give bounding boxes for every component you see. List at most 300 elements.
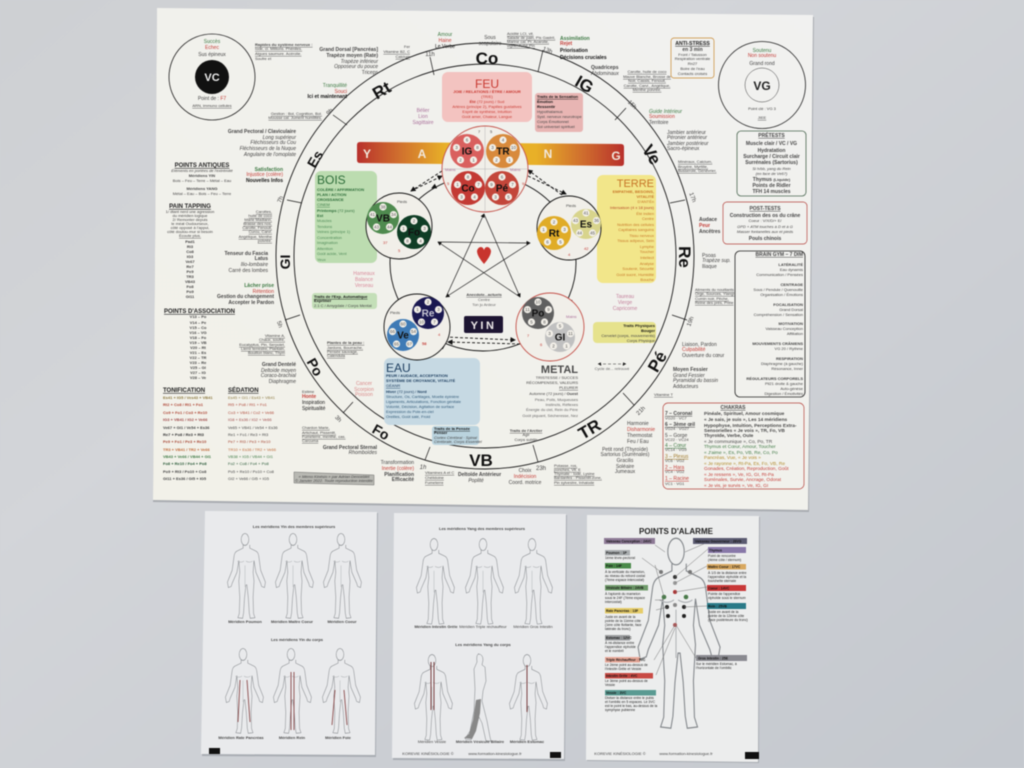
panel: post-tests: GPD + ATM touches à D et à G [737,224,793,229]
alarm labels right: Rein : 25VB [708,604,727,608]
panel: pain tapping: côté doulou-mur si besoin [167,229,213,234]
sheet: méridiens yang [392,513,567,761]
meridian disc: Po: 9 [547,307,550,312]
panel: tonification: Po9 + Rt3 / Po10 + Co8 [163,469,207,474]
panel: wood circle group: 37 [383,240,388,245]
panel: FEU: JOIE / RELATIONS / ÊTRE / AMOUR [453,89,521,94]
panel: tonification: GI11 + Es36 / GI5 + IG5 [163,476,207,481]
alarm labels left: Vessie : 3VC [606,691,627,695]
left column texts: upper: Souci [334,89,347,95]
panel: wood circle group: 5 [398,248,401,253]
left column texts: upper: Soufre et [255,56,272,61]
panel: pretests: Thymus (Liquide) [753,177,791,183]
left column texts: upper: Lion [418,114,428,120]
panel: tonification: Co9 + Fo1 / Co3 + Re10 [163,410,208,415]
sheet: méridiens yang: Méridien Vessie [418,739,447,744]
panel: chakras: CHAKRAS [720,405,746,411]
left column texts: upper: Algues saumure. Acérolie. [255,51,301,56]
panel: post-tests [723,202,807,244]
panel: EAU: EAU [386,361,411,375]
alarm labels left: Estomac : 12VC [606,636,632,640]
left column texts: upper: Angulaire de l'omoplate [243,152,296,158]
panel: anti-stress: Front / Talusson [678,52,707,57]
panel: VG circle [718,42,806,128]
left column texts: lower: Eucalyptus, Pin, Serpolet, [239,342,285,347]
left column texts: middle: Carré des lombes [229,268,268,274]
left column texts: lower: Grand Pectoral Sternal [323,445,378,451]
panel: points d'association: V14 – Pe [190,320,207,325]
left column texts: upper: Vitamine B2, C [383,49,410,54]
panel: pretests: Points de Ridler [752,183,791,189]
meridian disc: Ve: 54 [411,329,416,334]
meridian disc: Rt: 3 [563,227,566,232]
panel: traits de la sensation: Hypothalamus [537,109,563,114]
panel: pain tapping [166,204,214,299]
panel: TERRE: Nutrition des cellules [617,222,654,227]
left column texts: upper: Amour [438,32,453,38]
alarm labels right: Coeur : 14VC [708,586,730,590]
left column texts: middle: Accepter le Pardon [228,300,274,306]
panel: traits de la pensée: Cérébrale, Corps Essentiel [434,439,482,444]
left column texts: lower: Inertie (colère) [382,466,414,472]
left column texts: lower [239,333,501,485]
meridian disc: Es: Es [580,220,593,230]
meridian disc: VB: 38 [380,204,386,210]
meridian figures row 2 [225,649,360,733]
panel: VG circle: Grand rond [749,61,775,67]
panel: brain gym: Résonance, Inner [771,366,804,371]
hour labels: 7h [277,195,285,204]
panel: pretests: Hydratation [758,148,785,154]
sheet footer: KOREVIE KINÉSIOLOGIE © [594,751,646,756]
panel: pretests: Si h/bb, yang du Rein [752,166,791,171]
meridian disc: Co: 7 [477,182,480,187]
bottom right texts: Sacro-épineux [667,146,700,152]
meridian names on wheel: Rt [369,78,395,103]
alarm labels left: latérale du tronc) [605,627,630,631]
left column texts: lower: Spiritualité [302,406,326,412]
left column texts: lower: Poisson [355,392,373,398]
panel: metal circle group: 7 [527,333,530,338]
meridian disc: TR: TR [496,146,510,158]
panel: FEU: Esprit de synthèse, Intuition [462,109,512,114]
panel: points d'association: V28 – Ve [190,375,207,380]
panel: METAL: Instincts, Réflexes [546,402,578,407]
bottom right texts: Balance [355,277,373,283]
panel: post-tests: POST-TESTS [749,206,781,212]
bottom right texts: Bardanfes - Pissenlit-zone, [554,475,602,480]
panel: brain gym: CENTRAGE [781,282,803,287]
alarm labels right: À 1/3 de la distance entre [708,571,747,575]
meridian disc: Fo [397,215,431,249]
bottom right texts: Liaison, Pardon [682,342,717,348]
panel: chakras: « J'aime », Es, Po, VB, Re, Co, Po [704,450,778,456]
panel: VC circle [169,34,255,120]
panel: VG circle: JIEE [758,115,767,120]
panel: traits d'expression automatique [312,293,377,309]
panel: chakras: Pinéale, Spirituel, Amour cosmique [704,411,785,417]
panel: pain tapping: PAIN TAPPING [169,204,211,210]
alarm labels left: au niveau du rebord costal [605,574,645,578]
alarm labels right: (4ème côte / sternum) [708,558,741,562]
panel: chakras: VC1 · VG1 [665,481,685,486]
left column texts: lower: Grand Dentelé [262,362,296,368]
panel: sédation: TR10 + Es36 / TR2 + Ve66 [228,447,277,452]
meridian disc: TR: 3 [491,145,494,150]
panel: sédation: IG8 + Es36 / IG2 + Ve66 [228,417,272,422]
panel: traits physiques: Cervelet (corps, mouvements) [601,333,656,338]
panel: pain tapping: Co8 [186,249,195,254]
left column texts: upper: Trapèze inférieur [341,59,378,65]
panel: points antiques: Éléments en portées de l'extrémité [171,168,234,173]
panel: copyright footer: « Mémo Kinésio » par Adrian Denoeblet [299,474,370,479]
panel: chakras: VC6 · VG2 [665,458,685,463]
hour labels: 21h [636,406,647,417]
left column texts: lower: Estime [302,389,315,394]
bottom right texts: Iliaque [702,264,717,270]
hour labels: 11h [425,52,435,58]
panel: BOIS: CINEM [317,202,330,207]
alarm labels left: et le nombril [605,649,624,653]
hour labels: 15h [626,100,637,111]
left column texts: lower: Fumeterre [425,480,444,485]
bottom right texts: Trapèze sup. [702,258,731,264]
panel: pain tapping: Ri3 [187,244,194,249]
meridian disc: Pé: 5 [507,194,510,200]
panel: brain gym: Pil21 droite & gauche [765,381,804,386]
panel: BOIS: Attention [317,246,333,251]
alarm labels right: (face postérieure du tronc) [708,618,748,622]
panel: chakras: VC22 · VC24 [665,437,689,442]
left column texts: middle [217,209,274,306]
alarm labels left: Le 3ème point au-dessus de [605,679,648,683]
sheet: méridiens yang: Méridien Triple réchauffeur [459,624,507,629]
meridian disc: Pé: 7 [511,182,514,187]
panel: traits de la sensation: Émotion [537,99,554,104]
meridian disc: Re: 2 [427,300,430,304]
alarm labels left: l'Intestin Grêle et Vessie [605,667,641,671]
panel: pain tapping: Écoute plus. [179,233,201,238]
bottom right texts: Indécision [514,474,536,480]
sheet: méridiens yang: KOREVIE KINÉSIOLOGIE © [402,751,454,756]
left column texts: lower: Planification [384,472,414,478]
hour labels: 13h [542,47,553,56]
panel: METAL: TRISTESSE / SUCCES [536,375,578,380]
left column texts: upper: Triceps [362,70,378,76]
panel: traits de la pensée: Cortex Cérébral · Spinal [434,435,477,440]
panel: traits physiques: Bouger [641,328,655,333]
panel: brain gym: BRAIN GYM – 7 DIM [755,252,803,258]
meridian disc: Fo: Fo [408,228,420,238]
bottom right texts: Thymate · Iode, Lysine [554,471,595,476]
panel: tonification: VB43 + Ve66 / VB44 + GI1 [163,454,212,459]
panel: points antiques: Métal – Eau – Bois – Feu – Terre [173,191,232,196]
panel: points d'association: V15 – Co [190,325,207,330]
sheet: méridiens yang: Méridien Vésicule Biliaire [456,739,505,744]
panel: BOIS: BOIS [317,173,346,187]
meridian disc: Re: 7 [433,320,436,324]
panel: sédation: GI2 + Ve66 / GI5 + IG5 [228,476,270,481]
panel: sédation: Es45 + GI1 / Es43 + VB41 [228,395,276,400]
panel: copyright footer: © Janvier 2022. Toute reproduction interdite [295,478,374,483]
sheet: méridiens yin: Méridien Coeur [327,619,357,624]
meridian disc: Fo: 8 [406,238,409,244]
panel: brain gym: Organisation / Émotions [760,292,803,297]
pentagram star [438,214,530,297]
panel: earth circle group [537,196,601,260]
left column texts: lower: Rhomboïdes [349,450,377,456]
meridian disc: VB: 44 [387,224,392,230]
panel: EAU [384,358,480,425]
bottom right texts: Pyramidal du bassin [673,378,718,384]
panel: traits de la sensation: Corps Émotionnel [537,119,569,124]
left column texts: lower: Deltoïde moyen [261,368,296,374]
meridian disc: Re: Re [422,308,435,320]
meridian names on wheel: Fo [370,421,392,443]
meridian disc: Co: 4 [473,194,476,200]
alarm labels right: Pointe de l'appendice [708,592,740,596]
left column texts: lower: Plantes de la peau : [327,340,364,345]
bottom right texts: Péronier antérieur [667,135,707,141]
panel: chakras: Hypophyse, Intuition, Perceptions Extra- [704,423,797,429]
panel: tonification: IG3 + VB41 / IG2 + Ve66 [163,417,208,422]
bottom right texts: Rejet [560,41,573,47]
panel: pain tapping: le méat Oudourseux, [171,221,209,226]
meridian disc: Fo: 3 [423,226,426,231]
left column texts: upper: Injustice (colère) [246,172,283,178]
bottom right texts: Assimilation [560,36,590,42]
meridian disc: Pé [485,171,519,205]
YIN box: YIN [471,320,496,332]
panel: tonification [163,388,213,481]
alarm labels left: Intestin Grêle : 4VC [606,674,638,678]
bottom right texts: Bruyère, Myrtille, [678,164,708,169]
panel: chakras: 1 – Racine [665,476,689,482]
meridian disc: Es: 44 [577,230,582,236]
panel: chakras: VG20 · VC7 [665,416,687,420]
bottom right texts: Psoas [702,253,716,259]
panel: EAU: Volonté, Décision, Agitation de surface [386,404,455,409]
panel: BOIS: Yeux [317,257,326,262]
panel: traits d'expression automatique: 2.1 C / Amygdale / Corps Mental [314,303,372,308]
panel: anti-stress: Contacts croisés [678,71,707,76]
panel: chakras: Pancréas, Vue, « Je vois » [704,455,761,461]
panel: VC circle: Sus épineux [198,52,226,58]
alarm labels left: À la verticale du mamelon, [605,570,645,574]
bottom right texts: Ouverture du cœur [682,353,725,359]
left column texts: lower: Efficacité [392,477,414,483]
panel: chakras: Thymus et Cœur, Amour, Toucher [704,444,776,450]
meridian disc: Ve: Ve [397,330,409,342]
bottom right texts: Gracilis [617,458,634,464]
anecdote caption: Centre [478,297,491,302]
hour labels: 1h [420,465,427,471]
bottom right texts: Disharmonie [627,427,655,433]
meridian disc: VB: 43 [374,224,379,230]
left column texts: lower: Fumeterre, menthe, cas. [302,434,346,439]
panel: fire circle group: 5 [447,181,450,186]
panel: BOIS [315,171,377,263]
panel: tonification: Ve67 + GI1 / Ve54 + Es36 [163,425,210,430]
sheet: méridiens yin [201,511,378,757]
panel: water circle group: 58 [422,341,427,346]
panel: pain tapping: IG3 [187,254,194,259]
alarm labels left: sous le 24F (7ème espace [605,596,645,600]
panel: post-tests: Pouls chinois [749,236,781,242]
panel: water circle group [384,294,450,360]
panel: TERRE: Tissus adipeux, Sein [617,238,654,243]
panel: VC circle: Point de : F7 [198,96,226,102]
panel: chakras: 5 – Gorge [665,433,687,439]
panel: tonification: Fo8 + Re10 / Fo4 + Po8 [163,461,207,466]
meridian disc: Pé: 3 [494,194,497,200]
hour labels: 23h [536,466,546,472]
panel: pain tapping: Fo8 [186,284,194,289]
panel: metal circle group [516,293,584,361]
panel: BOIS: Est [317,213,324,218]
panel: TERRE: Intellect [640,255,655,260]
panel: pain tapping: Po9 [186,289,194,294]
panel: points d'association: V25 – GI [190,365,206,370]
panel: brain gym: Digestion / Émotivités [765,391,803,396]
panel: VG circle: VG [753,79,771,93]
left column texts: lower: Calendula [327,353,346,358]
meridian disc: Ve: 67 [407,342,412,346]
bottom right texts: Reine des prés, Prêle [695,300,734,305]
alarm labels right: pointe de la 12ème côte [708,614,744,618]
bottom right texts: Soléaire [616,464,634,470]
left column texts: middle: Tenseur du Fascia [224,251,268,257]
meridian disc: Co: Co [461,184,475,194]
left column texts: middle: Carotte, Fenouil, [242,225,272,230]
panel: sédation [228,386,278,481]
alarm labels right: fourchette sternale [708,579,736,583]
left column texts: upper: Nouvelles Infos [246,178,283,184]
panel: EAU: Hiver (72 jours) / Nord [386,389,427,394]
panel: chakras: VG24 · VG27 [665,426,690,431]
panel: metal circle group: Mains [566,314,577,319]
bottom right texts: Grand Fessier [673,373,705,379]
panel: TERRE: Intersaison (4 x 18 jours) [610,205,655,210]
sheet: méridiens yang: www.formation-kinesiologue.fr [468,751,522,756]
alarm labels right: Thymus [709,548,722,552]
bottom right texts: Mauve Blanche, Brosse de [623,74,672,79]
alarm labels right: Juste en avant de la [708,610,738,614]
panel: brain gym: Diaphragme (à gauche) [761,361,804,366]
sheet: méridiens yin: Méridien Poumon [228,619,262,624]
meridian names on wheel: IG [572,72,597,97]
meridian disc: VB: VB [376,214,390,224]
panel: sédation: Ve65 + VB41 / Ve54 + Es36 [228,425,278,430]
yang bar: N [544,147,552,161]
yang bar: Y [363,147,371,161]
left column texts: lower: Coraco-brachial [261,373,297,379]
panel: traits physiques: Corps Physique [627,338,656,343]
meridian names on wheel: Pé [644,348,671,376]
left column texts: middle: Angélique, Menthe [239,234,273,239]
panel: TERRE: Analyse [640,261,655,266]
meridian disc: GI: 1 [565,344,568,348]
meridian disc: TR: 10 [511,145,516,150]
panel: pain tapping: Pe9 [186,269,194,274]
panel: TERRE: Goût sucré, Humidité [616,272,655,277]
panel: chakras: Gonades, Création, Reproduction, Goût [704,466,789,472]
sheet: méridiens yin: Les méridiens Yin des membres supérieurs [253,524,336,529]
meridian disc: Re: 1 [416,307,419,312]
panel: traits de la pensée: Penser [434,430,448,435]
bottom right texts: ponches, Vit. E [554,467,581,472]
panel: TERRE: VITALITÉ [637,194,654,199]
bottom right texts: Feu / Eau [627,439,649,445]
left column texts: upper: Bélier [417,108,430,114]
meridian disc: VB [367,202,399,234]
sheet footer: www.formation-kinesiologue.fr [659,751,713,756]
left column texts: upper: Le Verbe [435,44,455,50]
left column texts: middle: Latus [255,256,268,262]
panel: tonification: Es41 + IG5 / Ves43 + VB41 [163,395,213,400]
panel: fire circle group: 7 [478,129,481,134]
left column texts: upper: Rapides du système nerveux : [255,42,313,47]
hour labels: 17h [687,192,696,203]
meridian figures row 2 [414,654,547,741]
panel: VC circle: VC [204,72,220,84]
alarm labels left: Vessie [605,683,615,687]
panel: TERRE: Tissu nerveux [629,233,654,238]
bottom right texts: Jumeaux [615,469,636,475]
panel: sédation: Re1 + Fo1 / Re3 + Rt3 [228,432,269,437]
meridian disc: Ve: 66 [390,329,395,334]
panel: anti-stress: Rn27 [688,61,698,66]
bottom right texts: Verseau [355,283,373,289]
panel: traits de la pensée: Traits de la Pensée [434,426,471,431]
bottom right texts: Quadriceps [591,65,619,71]
sheet: méridiens yin: Méridien Rate Pancréas [218,735,264,740]
panel: pretests [737,131,806,196]
alarm labels right [693,538,748,670]
panel: sédation: Co3 + VB41 / Co2 + Ve66 [228,410,275,415]
left column texts: upper: Fléchisseurs du Cou [250,140,296,146]
meridian disc: IG: IG [462,146,472,158]
panel: FEU: (TR/E) [481,94,494,99]
left column texts: middle: Ilio-lombaire [241,262,268,268]
panel: chakras [663,403,804,489]
alarm labels left: (7ème espace intercostal) [605,578,644,582]
bottom right texts: Territoire [649,120,669,126]
alarm labels left: Le 2ème point au-dessus de [605,663,648,667]
alarm labels left: À mi-distance entre [605,641,634,645]
panel: tonification: TONIFICATION [163,388,205,394]
panel: post-tests: Masser fontanelles aux et pieds [737,229,793,234]
panel: METAL: PLEURER [559,385,578,390]
bottom right texts: Busserole, Genévrier, [678,168,716,173]
meridian disc: Pé: 6 [501,174,504,180]
panel: pain tapping: 1/ dtant nerd une agression [166,209,214,214]
panel: brain gym: Compréhension / Sensation [754,312,803,317]
panel: points antiques [171,163,234,196]
alarm labels right: l'horizontale de l'ombilic [696,666,732,670]
panel: brain gym: MOUVEMENTS CRÂNIENS [752,341,803,346]
panel: VG circle: Soutenu [753,48,772,54]
bottom right texts: Carotte, Carvi., Angélique, [624,83,670,88]
panel: chakras: « Je communique », Co, Po, TR [704,439,773,445]
panel: chakras: « Je ressens », Ve, IG, GI, Rt-Pa [704,472,774,478]
meridian names on wheel: VB [469,451,493,470]
meridian names on wheel: Es [304,147,326,170]
panel: pain tapping: côté opposé à l'appui, [171,225,209,230]
left column texts: lower: Chardon Marie, [302,425,330,430]
panel: TERRE: Lymphe [640,244,655,249]
alarm labels left: Triple Réchauffeur : 5VC [606,658,646,662]
